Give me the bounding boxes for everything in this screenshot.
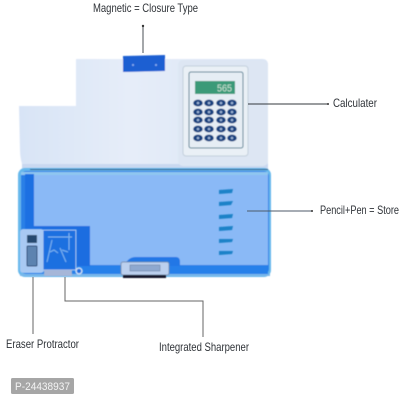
callout: eraser protractor <box>6 277 79 351</box>
pencil box tray <box>18 168 271 277</box>
callout: integrated sharpener <box>65 277 249 354</box>
callout: magnetic closure: Magnetic = Closure Type <box>93 1 198 15</box>
eraser and protractor compartment <box>20 229 82 276</box>
callout: eraser protractor: Eraser Protractor <box>6 337 79 351</box>
callout: calculator: Calculater <box>333 96 377 110</box>
callout: calculator <box>248 96 377 110</box>
callout: magnetic closure <box>93 1 198 53</box>
magnetic clasp <box>123 55 165 72</box>
pencil box lid <box>19 55 268 170</box>
pencil and pen slots <box>219 189 233 255</box>
integrated sharpener <box>121 262 169 278</box>
product id badge: P-24438937 <box>15 381 70 393</box>
eraser <box>27 235 37 266</box>
calculator <box>178 60 268 166</box>
product id badge <box>11 378 74 394</box>
calculator display: 565 <box>217 84 232 94</box>
protractor <box>43 230 76 276</box>
calculator keys <box>193 100 237 141</box>
callout: integrated sharpener: Integrated Sharpener <box>159 340 249 354</box>
